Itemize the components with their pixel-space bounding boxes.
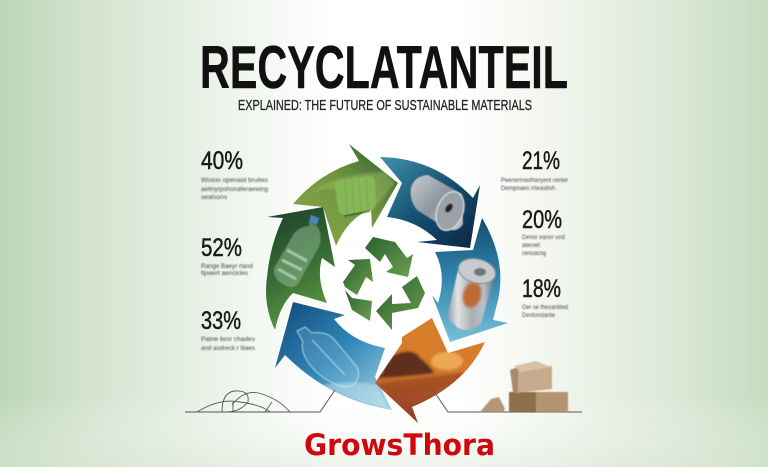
- icon: cardboard boxes: [480, 361, 568, 412]
- arrow: blue glass segment: [275, 302, 392, 410]
- stat: 33%: Patne liesr chades: [201, 336, 255, 343]
- stat: 52%: fipwert aencicles: [201, 270, 248, 277]
- baseline and connector lines: [185, 390, 582, 412]
- stat: 52%: [201, 234, 253, 277]
- circular recycling diagram: [266, 144, 508, 423]
- arrow: light blue tin segment: [432, 218, 508, 342]
- stat: 20%: 20%: [522, 206, 562, 234]
- stat: 33%: and asdreck r tliaes: [201, 345, 255, 352]
- icon: central recycling symbol: [343, 237, 425, 330]
- stat: 33%: [201, 307, 255, 352]
- arrow: dark bottle segment: [266, 207, 335, 330]
- stat: 40%: aetinyrpshonaferaewing: [201, 186, 268, 193]
- title: RECYCLATANTEIL: [200, 34, 568, 101]
- stat: 40%: Wision openaid bruites: [201, 177, 268, 184]
- stat: 20%: Denor eanor und: [522, 234, 565, 241]
- stat: 40%: 40%: [201, 147, 243, 175]
- arrow: dark blue can segment: [380, 157, 480, 248]
- stat: 20%: ateroet: [522, 242, 540, 249]
- icon: metal cylinder: [411, 175, 469, 234]
- stat: 40%: sealsons: [201, 194, 227, 201]
- icon: green cylinder: [335, 176, 376, 216]
- icon: tin can: [447, 255, 498, 330]
- brand name: GrowsThora: [304, 428, 495, 462]
- arrow: orange landscape segment: [375, 318, 485, 423]
- subtitle: EXPLAINED: THE FUTURE OF SUSTAINABLE MATERIALS: [238, 98, 532, 114]
- stat: 18%: 18%: [522, 275, 561, 303]
- stat: 20%: [522, 206, 565, 257]
- stat: 21%: 21%: [522, 147, 560, 175]
- right statistics: [501, 147, 568, 319]
- icon: plastic bottle: [274, 215, 321, 287]
- stat: 33%: 33%: [201, 307, 241, 335]
- stat: 18%: Oer se thesantited: [522, 304, 568, 311]
- line art: hills: [197, 391, 290, 412]
- stat: 40%: [201, 147, 268, 201]
- stat: 52%: 52%: [201, 234, 242, 262]
- stat: 20%: cenoacng: [522, 250, 546, 257]
- stat: 52%: Range Baeyr rtand: [201, 263, 253, 270]
- left statistics: [201, 147, 268, 352]
- stat: 18%: Devlonoiante: [522, 312, 555, 319]
- stat: 21%: Dempnaes rrteasitsh: [501, 185, 555, 192]
- icon: glass bottle: [297, 327, 359, 387]
- stat: 21%: [501, 147, 568, 192]
- stat: 21%: Pwenermasthanyent center: [501, 177, 568, 184]
- stat: 18%: [522, 275, 568, 319]
- arrow: green roll segment: [293, 144, 398, 246]
- landscape hill: [377, 352, 434, 378]
